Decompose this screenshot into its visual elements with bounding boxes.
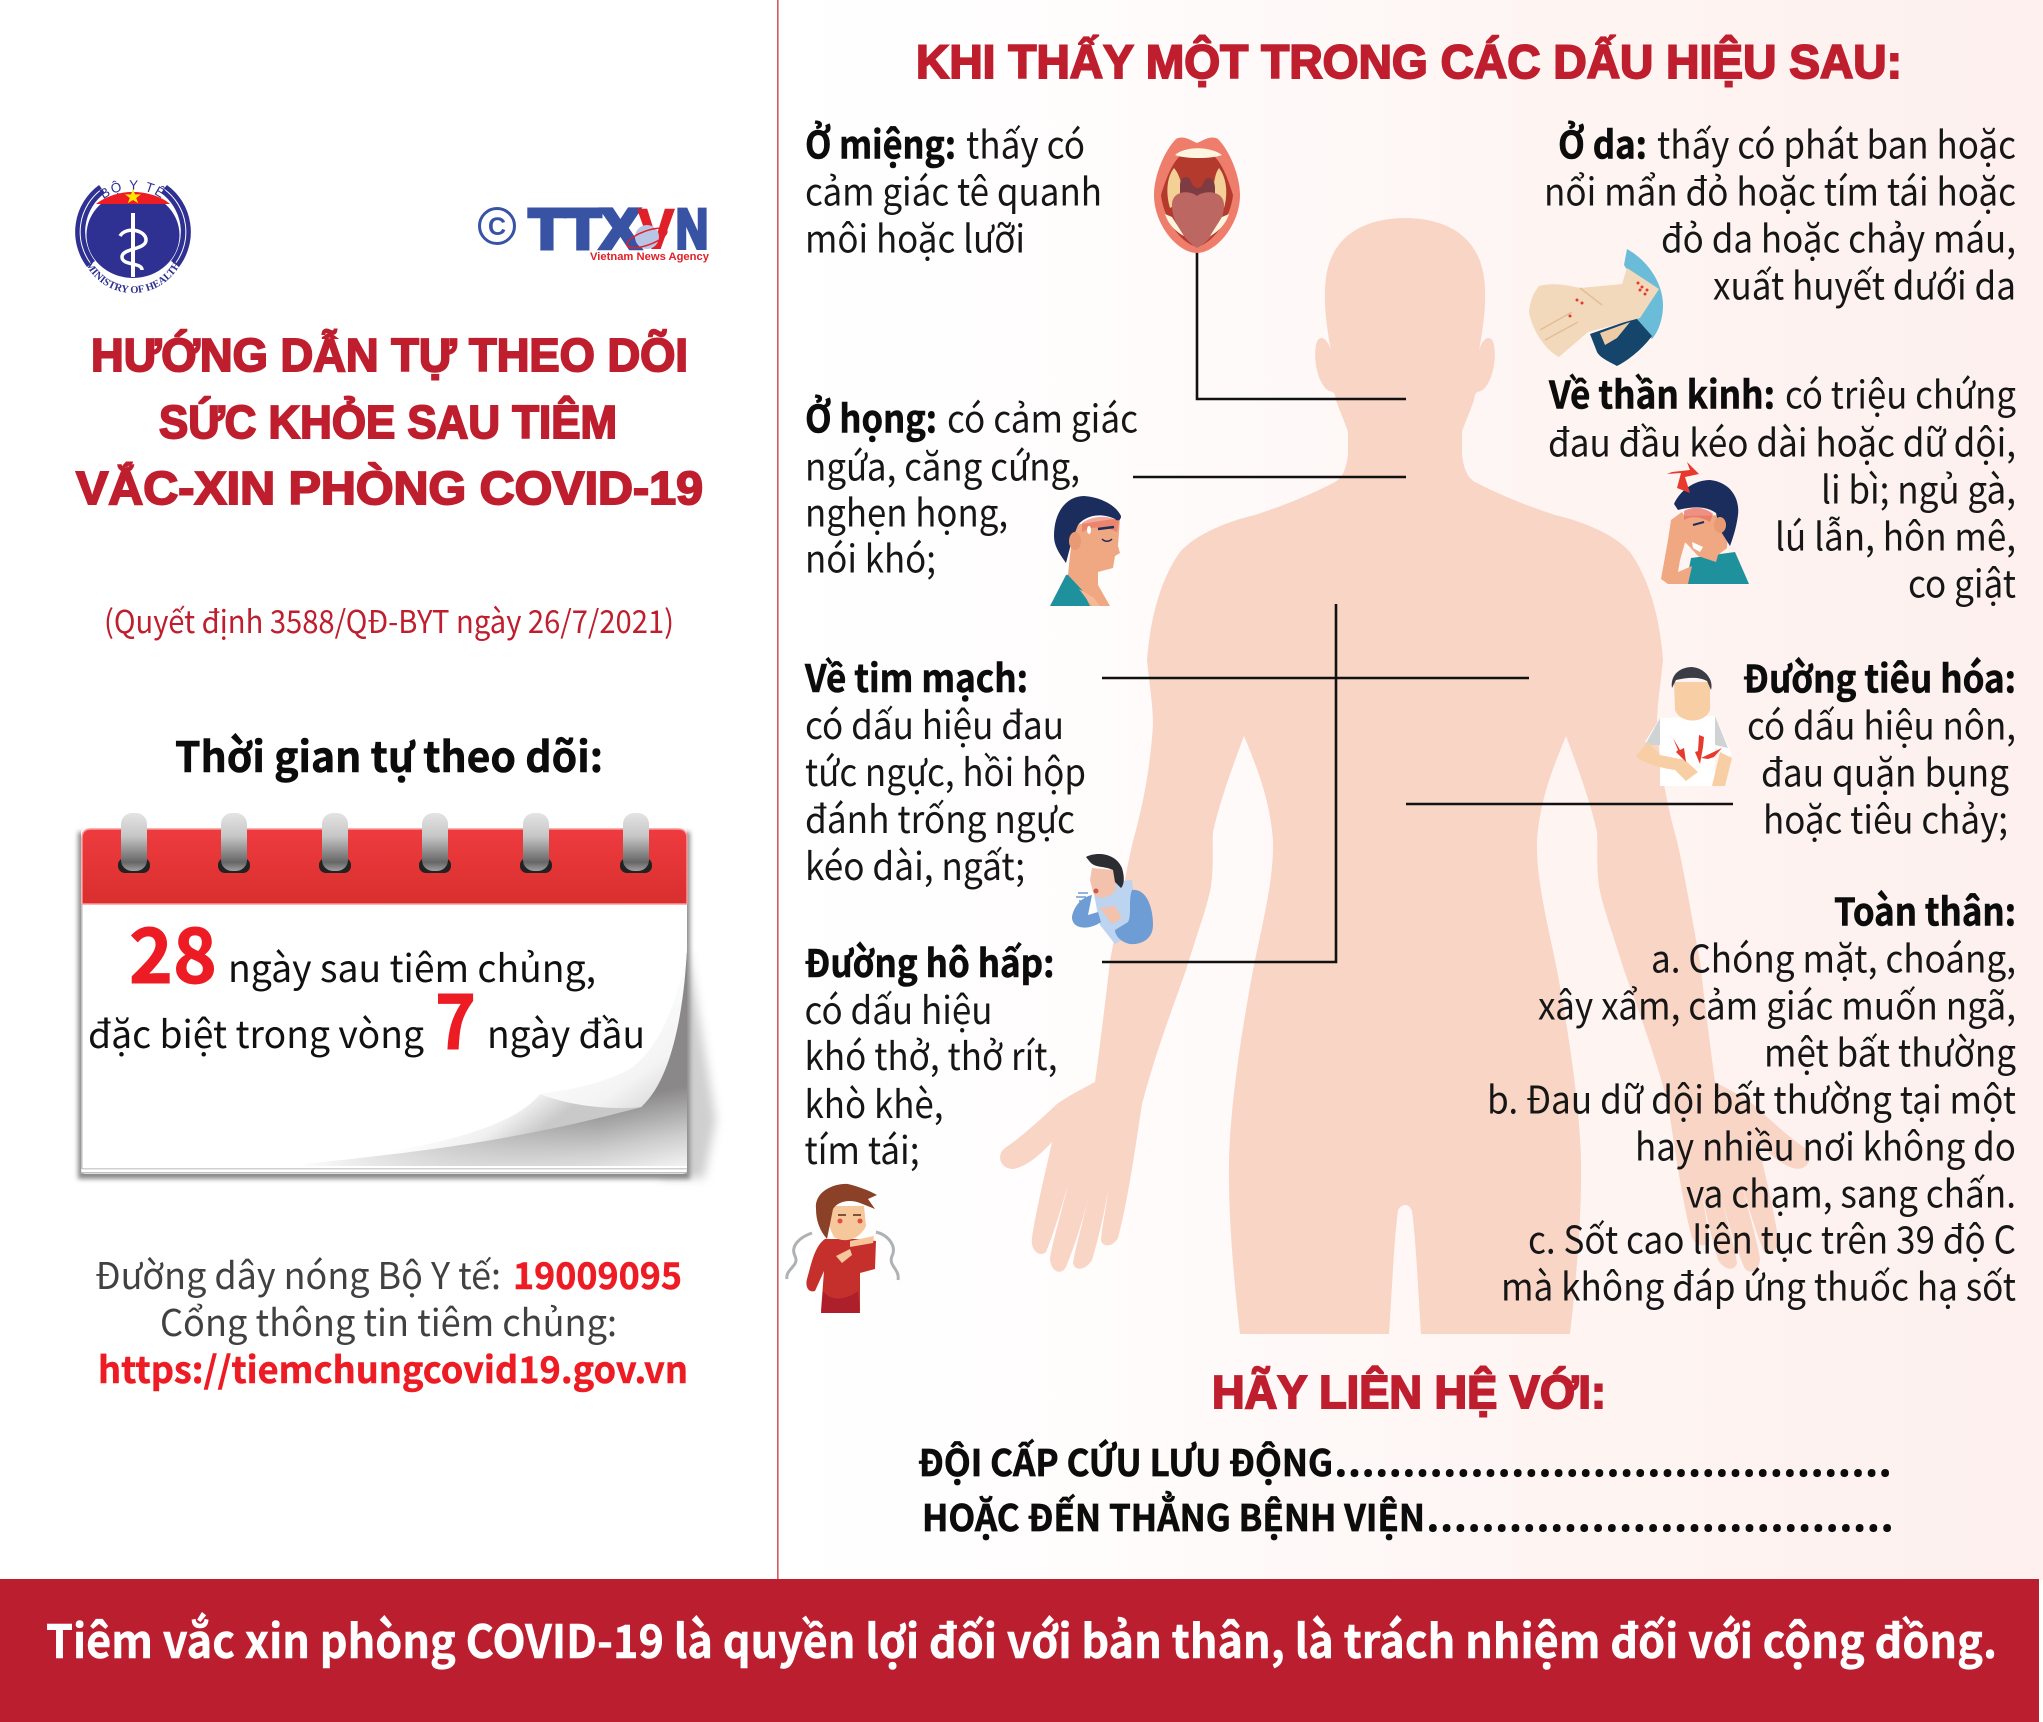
text: neurological symptoms: đau đầu kéo dài hoặc dữ dội, [1548,412,2016,468]
text: cardiovascular symptoms [804,648,1086,891]
calendar text: ngày đầu [487,1004,645,1059]
icon: breathless person [787,1184,898,1313]
calendar [78,813,716,1179]
hotline and portal: https://tiemchungcovid19.gov.vn [98,1341,688,1394]
text: digestive symptoms: có dấu hiệu nôn, [1747,696,2016,750]
contact lines [918,1434,1893,1542]
contact lines: .................................. [1427,1490,1893,1542]
panel divider [777,0,779,1582]
calendar rings [118,813,652,873]
logo: Ministry of Health: MINISTRY OF HEALTH [88,262,179,294]
text: throat symptoms: Ở họng: [805,388,937,444]
icon: skin rash on arm [1529,249,1663,366]
calendar text: 7 [435,961,476,1071]
icon: chest pain person [1072,854,1153,944]
icon: headache person [1661,462,1749,584]
text: throat symptoms: có cảm giác [947,388,1138,444]
text: cardiovascular symptoms: tức ngực, hồi hộp [805,742,1086,797]
logo: Ministry of Health: BỘ Y TẾ [100,180,166,199]
hotline and portal: Cổng thông tin tiêm chủng: [160,1294,617,1347]
calendar text: 28 [129,895,217,1005]
contact heading: HÃY LIÊN HỆ VỚI: [1212,1366,1606,1418]
text: skin symptoms: đỏ da hoặc chảy máu, [1661,208,2016,264]
text: neurological symptoms: li bì; ngủ gà, [1821,460,2016,514]
text: mouth symptoms: thấy có [966,114,1085,170]
body silhouette [1000,218,1810,1334]
logo: TTXVN Vietnam News Agency: Vietnam News Agency [590,251,710,263]
text: throat symptoms: nghẹn họng, [805,482,1008,538]
text: general symptoms: va chạm, sang chấn. [1686,1164,2016,1218]
title: VẮC-XIN PHÒNG COVID-19 [76,462,703,514]
text: digestive symptoms: đau quặn bụng [1761,742,2009,798]
icon: open mouth [1154,138,1240,253]
hotline and portal [95,1247,688,1394]
text: general symptoms: c. Sốt cao liên tục trên 39 độ C [1528,1210,2016,1264]
text: throat symptoms: nói khó; [805,528,936,584]
title: SỨC KHỎE SAU TIÊM [159,396,617,448]
text: general symptoms: mà không đáp ứng thuốc hạ sốt [1501,1256,2016,1312]
text: general symptoms: b. Đau dữ dội bất thường tại một [1487,1070,2016,1124]
text: general symptoms: Toàn thân: [1834,882,2016,936]
text: digestive symptoms: hoặc tiêu chảy; [1763,790,2008,844]
title: HƯỚNG DẪN TỰ THEO DÕI [91,329,688,381]
text: skin symptoms: nổi mẩn đỏ hoặc tím tái hoặc [1544,162,2016,216]
text: cardiovascular symptoms: Về tim mạch: [804,648,1028,703]
logo: TTXVN Vietnam News Agency: TTX [529,197,640,260]
contact lines: ĐỘI CẤP CỨU LƯU ĐỘNG [918,1434,1333,1487]
right heading: KHI THẤY MỘT TRONG CÁC DẤU HIỆU SAU: [916,35,1902,88]
hotline and portal: Đường dây nóng Bộ Y tế: [95,1247,501,1300]
text: neurological symptoms: co giật [1908,554,2016,608]
text: respiratory symptoms: tím tái; [804,1120,920,1175]
text: neurological symptoms: Về thần kinh: [1548,364,1775,420]
calendar text: ngày sau tiêm chủng, [228,938,596,993]
monitoring time heading: Thời gian tự theo dõi: [175,724,603,785]
text: neurological symptoms [1548,364,2016,608]
text: neurological symptoms: có triệu chứng [1785,364,2016,420]
title [76,329,703,514]
text: mouth symptoms [805,114,1102,264]
text: cardiovascular symptoms: đánh trống ngực [805,789,1075,844]
text: mouth symptoms: Ở miệng: [805,114,956,170]
calendar red header [82,829,687,904]
connector lines [1102,252,1733,962]
text: general symptoms: hay nhiều nơi không do [1635,1116,2016,1172]
text: skin symptoms: xuất huyết dưới da [1713,256,2016,310]
text: skin symptoms: Ở da: [1558,114,1647,170]
contact lines: ......................................... [1335,1435,1891,1487]
text: cardiovascular symptoms: kéo dài, ngất; [805,836,1025,891]
text: respiratory symptoms: có dấu hiệu [804,980,992,1035]
calendar text: đặc biệt trong vòng [88,1004,424,1059]
text: respiratory symptoms [804,933,1058,1175]
text: skin symptoms: thấy có phát ban hoặc [1657,114,2016,170]
text: general symptoms: a. Chóng mặt, choáng, [1651,928,2016,984]
text: respiratory symptoms: Đường hô hấp: [804,933,1054,988]
text: digestive symptoms: Đường tiêu hóa: [1743,648,2016,704]
contact lines: HOẶC ĐẾN THẲNG BỆNH VIỆN [922,1489,1425,1542]
panel background: right [778,0,2043,1580]
text: mouth symptoms: cảm giác tê quanh [805,162,1102,216]
hotline and portal: 19009095 [513,1247,682,1300]
text: general symptoms: xây xẩm, cảm giác muốn ngã, [1538,976,2016,1030]
text: cardiovascular symptoms: có dấu hiệu đau [805,695,1064,750]
logo: TTXVN Vietnam News Agency [480,197,710,263]
text: general symptoms [1487,882,2016,1312]
text: throat symptoms [805,388,1138,584]
text: general symptoms: mệt bất thường [1764,1022,2016,1078]
decision reference: (Quyết định 3588/QĐ-BYT ngày 26/7/2021) [104,597,674,643]
icon: throat pain person [1050,496,1121,606]
text: respiratory symptoms: khó thở, thở rít, [804,1026,1058,1081]
calendar text [88,895,645,1071]
logo: TTXVN Vietnam News Agency: N [676,197,708,260]
text: skin symptoms [1544,114,2016,310]
logo: TTXVN Vietnam News Agency: C [488,213,506,241]
text: mouth symptoms: môi hoặc lưỡi [805,208,1025,264]
text: throat symptoms: ngứa, căng cứng, [805,436,1080,492]
text: neurological symptoms: lú lẫn, hôn mê, [1775,506,2016,562]
logo: TTXVN Vietnam News Agency: V [638,197,674,260]
text: digestive symptoms [1743,648,2016,844]
logo: Ministry of Health [75,180,191,294]
icon: stomach pain person [1636,667,1732,786]
text: respiratory symptoms: khò khè, [804,1074,944,1129]
bottom banner [0,1579,2039,1722]
